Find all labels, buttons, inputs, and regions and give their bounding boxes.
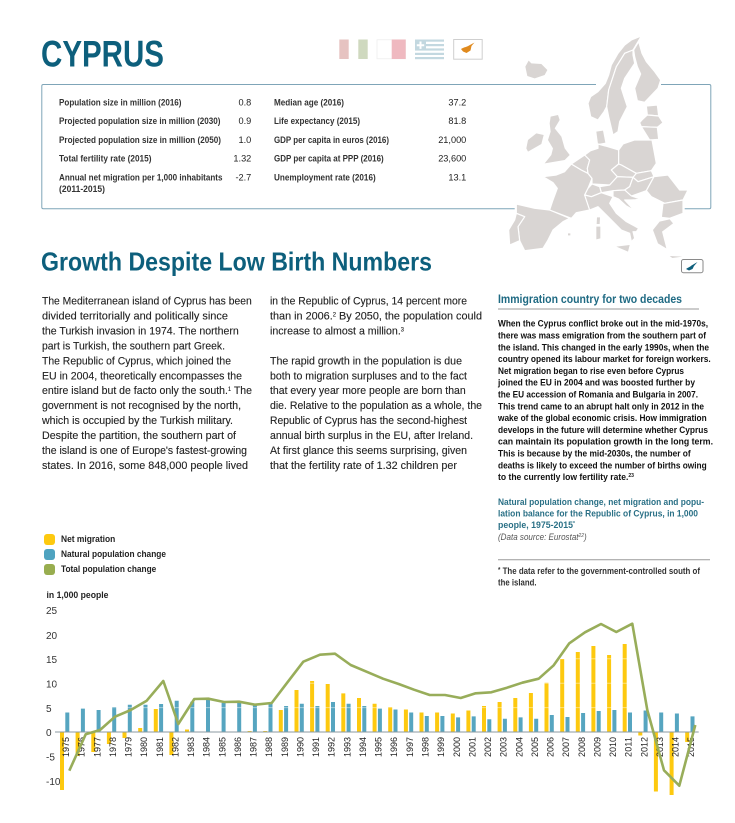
sidebar text (497, 318, 713, 482)
x axis year labels: 1982 (170, 737, 180, 757)
y axis labels: 25 (46, 606, 58, 617)
body text: second column: annual birth surplus in the EU, after Ireland. (270, 430, 473, 442)
x axis year labels: 2014 (671, 737, 681, 757)
y axis labels (46, 606, 61, 788)
x axis year labels: 2003 (499, 737, 509, 757)
body text: first column: states. In 2016, some 848,000 people lived (42, 460, 248, 472)
x axis year labels: 2010 (608, 737, 618, 757)
x axis year labels: 1977 (92, 737, 102, 757)
body text: second column: increase to almost a million. (270, 325, 406, 337)
x axis year labels: 1998 (420, 737, 430, 757)
footnote: The data refer to the government-controlled south of (500, 566, 701, 576)
body text: first column: Despite the partition, the southern part of (42, 430, 237, 442)
sidebar heading: Immigration country for two decades (498, 294, 682, 306)
x axis year labels: 1990 (296, 737, 306, 757)
statistics right column: 81.8 (448, 116, 466, 126)
flag: Malta (377, 40, 406, 59)
x axis year labels: 2009 (592, 737, 602, 757)
sidebar text: This is because by the mid-2030s, the number of (498, 448, 691, 458)
flag: Greece (415, 40, 444, 59)
body text: first column: entire island but de facto only the south. (42, 385, 236, 397)
x axis year labels: 1986 (233, 737, 243, 757)
sidebar text: there was mass emigration from the southern part of (498, 330, 707, 340)
flag: Cyprus (454, 40, 482, 59)
sidebar text: Net migration began to rise even before Cyprus (498, 365, 684, 376)
statistics left column: (2011-2015) (59, 184, 105, 194)
body text: first column (41, 296, 252, 472)
sidebar text: 23 (628, 473, 634, 479)
sidebar text: country opened its labour market for foreign workers. (498, 353, 711, 364)
chart caption: lation balance for the Republic of Cyprus, in 1,000 (498, 509, 698, 520)
sidebar text: deaths is likely to exceed the number of births owing (498, 459, 707, 470)
x axis year labels: 1980 (139, 737, 149, 757)
sidebar text: When the Cyprus conflict broke out in the mid-1970s, (498, 318, 708, 329)
body text: second column: 2 (333, 312, 337, 318)
statistics left column: 0.9 (239, 116, 251, 126)
flags row (339, 40, 482, 59)
x axis year labels: 1979 (124, 737, 134, 757)
sidebar: immigration country (497, 294, 713, 588)
x axis year labels: 2013 (655, 737, 665, 757)
chart caption: Natural population change, net migration and popu- (498, 497, 704, 508)
x axis year labels: 1976 (77, 737, 87, 757)
x axis year labels: 2012 (639, 737, 649, 757)
body text: second column: that every year more people are born than (270, 385, 466, 397)
bars: net migration (62, 644, 687, 795)
y axis labels: 5 (46, 704, 52, 715)
footnote: * (498, 567, 501, 574)
y axis labels: 10 (46, 680, 58, 690)
body text: first column: The Mediterranean island of Cyprus has been (42, 296, 252, 308)
body text: second column: than in 2006. (270, 310, 334, 322)
bars: natural population change (67, 699, 693, 732)
x axis year labels: 1983 (186, 737, 196, 757)
panel: key statistics (42, 84, 711, 209)
sidebar text: This trend came to an abrupt halt only in 2012 in the (498, 400, 704, 411)
y axis labels: -10 (46, 777, 61, 788)
body text: first column: divided territorially and politically since (42, 310, 228, 322)
x axis year labels: 1997 (405, 737, 415, 757)
statistics right column: Life expectancy (2015) (274, 116, 360, 126)
x axis year labels: 2006 (546, 737, 556, 757)
statistics right column: Unemployment rate (2016) (274, 172, 376, 182)
chart: population change (46, 590, 699, 795)
body text: second column: At first glance this seems surprising, given (270, 445, 467, 457)
body text: first column: The Republic of Cyprus, which joined the (42, 355, 231, 367)
sidebar text: wake of the global economic crisis. How immigration (497, 412, 707, 423)
sidebar text: to the currently low fertility rate. (498, 471, 641, 482)
body text: first column: which is occupied by the Turkish military. (41, 415, 233, 427)
x axis year labels: 1988 (264, 737, 274, 757)
x axis year labels: 1994 (358, 737, 368, 757)
y axis labels: 15 (46, 655, 58, 666)
x axis year labels: 1978 (108, 737, 118, 757)
y axis labels: 0 (46, 728, 52, 739)
chart caption: ) (583, 532, 587, 542)
statistics right column: GDP per capita at PPP (2016) (274, 154, 384, 164)
title: CYPRUS (41, 34, 164, 74)
y axis labels: -5 (46, 752, 55, 764)
statistics left column: Population size in million (2016) (59, 98, 182, 108)
body text: second column: The rapid growth in the population is due (270, 355, 462, 367)
map of Europe (509, 37, 687, 258)
legend: natural population change: Natural population change (61, 549, 166, 559)
x axis year labels: 1981 (155, 737, 165, 757)
x axis year labels: 2008 (577, 737, 587, 757)
body text: first column: EU in 2004, theoretically encompasses the (42, 370, 242, 382)
x axis year labels: 2002 (483, 737, 493, 757)
body text: first column: 1 (228, 387, 232, 393)
x axis year labels: 1984 (202, 737, 212, 757)
x axis year labels: 1996 (389, 737, 399, 757)
body text: second column: 3 (401, 327, 405, 333)
sidebar text: can maintain its population growth in the long term. (498, 436, 713, 447)
statistics left column (59, 98, 251, 194)
body text: second column: Republic of Cyprus has the second-highest (270, 415, 467, 427)
x axis year labels: 1985 (217, 737, 227, 757)
x axis year labels: 2007 (561, 737, 571, 757)
y axis labels: 20 (46, 631, 58, 642)
legend: total population change: Total population change (61, 564, 156, 574)
heading: Growth Despite Low Birth Numbers (41, 246, 432, 276)
x axis year labels: 2000 (452, 737, 462, 757)
x axis year labels: 1987 (249, 737, 259, 757)
x axis year labels: 1975 (61, 737, 71, 757)
body text: second column: die. Relative to the population as a whole, the (270, 400, 482, 412)
chart caption (498, 497, 704, 542)
x axis year labels: 2011 (624, 737, 634, 757)
x axis year labels: 2001 (467, 737, 477, 757)
statistics left column: Projected population size in million (2050) (59, 135, 221, 145)
x axis year labels: 1995 (374, 737, 384, 757)
statistics left column: -2.7 (235, 172, 251, 182)
body text: second column: in the Republic of Cyprus, 14 percent more (270, 296, 467, 308)
x axis year labels: 2015 (686, 737, 696, 757)
statistics right column: 37.2 (448, 98, 466, 108)
chart caption: people, 1975-2015 (498, 520, 580, 531)
footnote: the island. (498, 578, 536, 588)
statistics right column: GDP per capita in euros (2016) (274, 135, 389, 145)
y axis unit: in 1,000 people (46, 590, 108, 600)
body text: second column: that the fertility rate of 1.32 children per (270, 460, 457, 472)
statistics right column (274, 98, 466, 182)
footnote (498, 566, 701, 588)
sidebar text: the island. This changed in the early 1990s, when the (498, 341, 709, 352)
x axis year labels: 2005 (530, 737, 540, 757)
icon: Cyprus locator (682, 260, 703, 273)
body text: first column: The (231, 385, 252, 397)
zero axis (55, 731, 699, 733)
statistics right column: 13.1 (448, 172, 466, 182)
statistics left column: 1.0 (239, 135, 251, 145)
flag: Italy (339, 40, 368, 59)
legend: net migration: Net migration (61, 534, 115, 544)
statistics right column: 23,600 (438, 154, 466, 164)
line: total population change (69, 624, 695, 786)
x axis year labels: 1989 (280, 737, 290, 757)
statistics right column: Median age (2016) (274, 98, 344, 108)
x axis year labels: 2004 (514, 737, 524, 757)
body text: first column: the island is one of Europe's fastest-growing (42, 445, 247, 457)
chart caption: (Data source: Eurostat (498, 532, 588, 542)
chart legend (44, 534, 166, 575)
sidebar text: the EU accession of Romania and Bulgaria in 2007. (498, 388, 698, 400)
body text: second column: By 2050, the population could (336, 310, 482, 322)
body text: first column: the Turkish invasion in 1974. The northern (42, 325, 239, 337)
x axis year labels: 1993 (342, 737, 352, 757)
statistics left column: Total fertility rate (2015) (59, 154, 152, 164)
sidebar text: joined the EU in 2004 and was boosted further by (497, 377, 696, 388)
x axis year labels: 1999 (436, 737, 446, 757)
x axis year labels (61, 737, 696, 757)
statistics left column: Annual net migration per 1,000 inhabitants (59, 172, 222, 182)
panel frame (42, 84, 711, 209)
statistics left column: 1.32 (233, 154, 251, 164)
chart caption: * (573, 521, 576, 527)
chart caption: 22 (578, 533, 584, 539)
x axis year labels: 1992 (327, 737, 337, 757)
statistics right column: 21,000 (438, 135, 466, 145)
statistics left column: 0.8 (239, 98, 251, 108)
body text: second column: both to migration surpluses and to the fact (270, 370, 467, 382)
x axis year labels: 1991 (311, 737, 321, 757)
body text: first column: government is not recognised by the north, (42, 400, 241, 412)
body text: first column: part is Turkish, the southern part Greek. (42, 340, 225, 352)
statistics left column: Projected population size in million (2030) (59, 116, 221, 126)
sidebar text: develops in the future will determine whether Cyprus (498, 424, 708, 435)
body text: second column (270, 296, 482, 472)
